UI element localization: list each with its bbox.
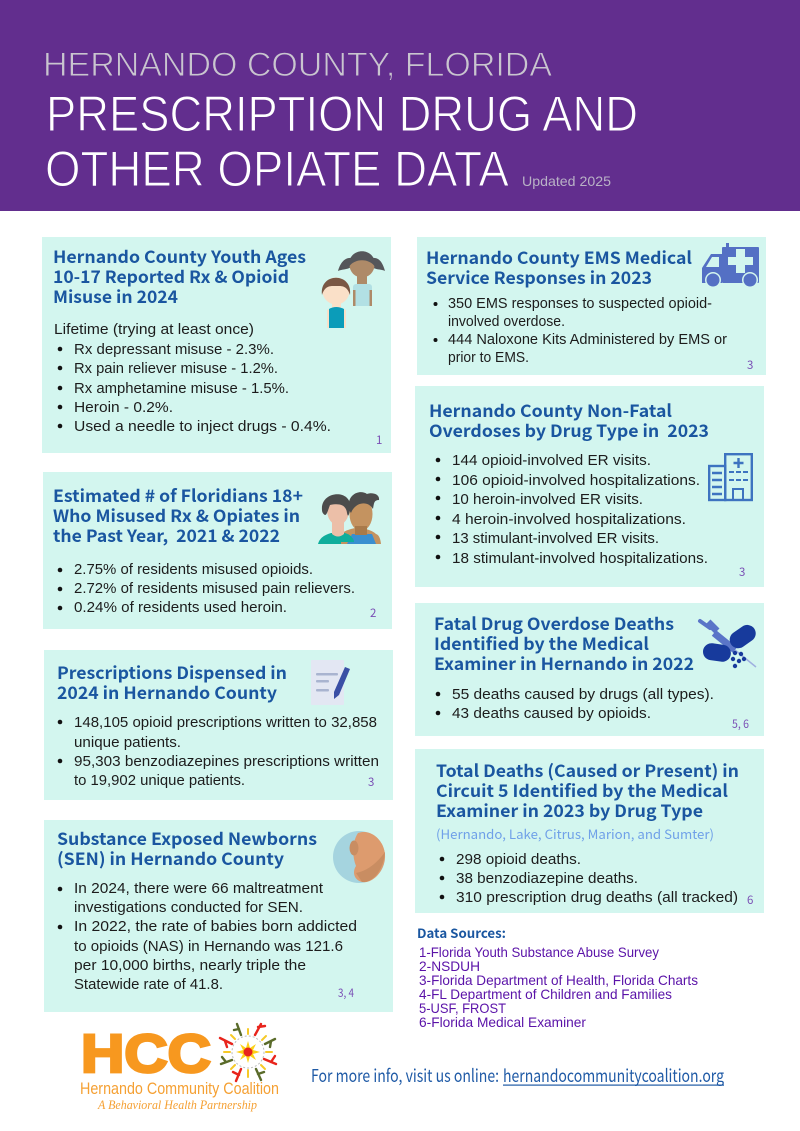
- bullet list: unique patients.: [74, 734, 181, 751]
- data sources list: 6-Florida Medical Examiner: [419, 1014, 586, 1030]
- source reference: 2: [370, 605, 376, 621]
- website call to action: hernandocommunitycoalition.org: [503, 1063, 724, 1088]
- source reference: 6: [747, 892, 753, 908]
- icon: newborn: [333, 831, 385, 883]
- heading: adult misuse: Estimated # of Floridians 18+: [53, 482, 303, 507]
- heading: newborns: (SEN) in Hernando County: [57, 845, 284, 870]
- bullet list: 298 opioid deaths.: [456, 851, 581, 868]
- bullet list: 148,105 opioid prescriptions written to 32,858: [74, 714, 377, 731]
- heading: EMS: Service Responses in 2023: [426, 264, 652, 289]
- main title: OTHER OPIATE DATA: [45, 141, 510, 197]
- icon: prescription pad and pen: [311, 660, 350, 705]
- bullet list: 95,303 benzodiazepines prescriptions written: [74, 753, 379, 770]
- bullet list: [436, 452, 708, 567]
- updated note: Updated 2025: [522, 173, 611, 189]
- heading: newborns: [57, 825, 317, 870]
- panel: non-fatal overdoses: [415, 386, 764, 587]
- data sources list: [419, 944, 698, 1030]
- bullet list: 444 Naloxone Kits Administered by EMS or: [448, 331, 727, 348]
- heading: prescriptions: [57, 659, 287, 704]
- source reference: 3: [739, 564, 745, 580]
- bullet list: per 10,000 births, nearly triple the: [74, 957, 306, 974]
- bullet list: involved overdose.: [448, 313, 565, 330]
- heading: EMS: Hernando County EMS Medical: [426, 244, 692, 269]
- heading: fatal overdoses: Examiner in Hernando in 2022: [434, 650, 694, 675]
- website call to action: For more info, visit us online:: [311, 1063, 499, 1088]
- panel: youth misuse: [42, 237, 391, 453]
- bullet list: 10 heroin-involved ER visits.: [452, 491, 643, 508]
- bullet list: 2.72% of residents misused pain relievers.: [74, 580, 355, 597]
- panel: fatal overdose deaths: [415, 603, 764, 736]
- panel: adult misuse: [43, 472, 392, 629]
- bullet list: investigations conducted for SEN.: [74, 899, 303, 916]
- source reference: 3: [747, 357, 753, 373]
- source reference: 3, 4: [338, 985, 355, 1001]
- bullet list: Used a needle to inject drugs - 0.4%.: [74, 418, 331, 435]
- heading: total deaths: Total Deaths (Caused or Present) in: [436, 757, 739, 782]
- bullet list: In 2024, there were 66 maltreatment: [74, 880, 324, 897]
- bullet list: 2.75% of residents misused opioids.: [74, 561, 313, 578]
- logo letters: HCC: [81, 1024, 211, 1084]
- main title: PRESCRIPTION DRUG AND: [46, 86, 638, 142]
- heading: youth misuse: Misuse in 2024: [53, 283, 178, 308]
- data sources list: 3-Florida Department of Health, Florida Charts: [419, 972, 698, 988]
- heading: fatal overdoses: Fatal Drug Overdose Deaths: [434, 610, 674, 635]
- bullet list: [436, 686, 714, 722]
- website call to action: [311, 1063, 724, 1088]
- bullet list: [440, 851, 738, 906]
- heading: EMS: [426, 244, 692, 289]
- logo emblem: ring of figures around sun: [220, 1024, 276, 1081]
- source reference: 1: [376, 432, 382, 448]
- heading: youth misuse: Hernando County Youth Ages: [53, 243, 306, 268]
- bullet list: 350 EMS responses to suspected opioid-: [448, 295, 712, 312]
- heading: non-fatal overdoses: [429, 397, 709, 442]
- bullet list: 43 deaths caused by opioids.: [452, 705, 651, 722]
- bullet list: prior to EMS.: [448, 349, 529, 366]
- bullet list: 310 prescription drug deaths (all tracked): [456, 889, 738, 906]
- bullet list: [58, 561, 355, 616]
- bullet list: [58, 341, 331, 435]
- bullet list: Rx pain reliever misuse - 1.2%.: [74, 360, 278, 377]
- bullet list: to 19,902 unique patients.: [74, 772, 245, 789]
- icon: syringe and pills: [700, 621, 759, 668]
- data sources: [417, 923, 698, 1030]
- heading: adult misuse: Who Misused Rx & Opiates in: [53, 502, 300, 527]
- bullet list: Rx depressant misuse - 2.3%.: [74, 341, 274, 358]
- heading: non-fatal overdoses: Overdoses by Drug Type in 2023: [429, 417, 709, 442]
- bullet list: to opioids (NAS) in Hernando was 121.6: [74, 938, 343, 955]
- bullet list: Rx amphetamine misuse - 1.5%.: [74, 380, 289, 397]
- bullet list: Statewide rate of 41.8.: [74, 976, 223, 993]
- icon: two adults: [318, 492, 381, 544]
- main title: [45, 86, 638, 197]
- data sources list: 2-NSDUH: [419, 958, 480, 974]
- bullet list: 0.24% of residents used heroin.: [74, 599, 287, 616]
- heading: newborns: Substance Exposed Newborns: [57, 825, 317, 850]
- heading: fatal overdoses: Identified by the Medical: [434, 630, 649, 655]
- panel: prescriptions dispensed: [44, 650, 393, 800]
- heading: adult misuse: [53, 482, 303, 547]
- icon: two children: [322, 251, 385, 328]
- logo: Hernando Community Coalition: [80, 1024, 279, 1112]
- bullet list: 18 stimulant-involved hospitalizations.: [452, 550, 708, 567]
- heading: non-fatal overdoses: Hernando County Non-Fatal: [429, 397, 672, 422]
- panel: substance exposed newborns: [44, 820, 393, 1012]
- heading: prescriptions: 2024 in Hernando County: [57, 679, 277, 704]
- bullet list: [434, 295, 727, 366]
- data sources list: 1-Florida Youth Substance Abuse Survey: [419, 944, 659, 960]
- heading: prescriptions: Prescriptions Dispensed in: [57, 659, 287, 684]
- bullet list: 4 heroin-involved hospitalizations.: [452, 511, 686, 528]
- logo name: Hernando Community Coalition: [80, 1079, 279, 1098]
- panel: total deaths circuit 5: [415, 749, 764, 913]
- heading: total deaths: Circuit 5 Identified by the Medical: [436, 777, 728, 802]
- intro line: Lifetime (trying at least once): [54, 321, 254, 338]
- icon: hospital: [709, 454, 752, 500]
- bullet list: Heroin - 0.2%.: [74, 399, 173, 416]
- data sources heading: Data Sources:: [417, 923, 506, 942]
- bullet list: 55 deaths caused by drugs (all types).: [452, 686, 714, 703]
- counties note: (Hernando, Lake, Citrus, Marion, and Sumter): [436, 824, 714, 843]
- bullet list: In 2022, the rate of babies born addicted: [74, 918, 357, 935]
- header banner: [0, 0, 800, 211]
- bullet list: 144 opioid-involved ER visits.: [452, 452, 651, 469]
- bullet list: [58, 880, 357, 993]
- heading: youth misuse: [53, 243, 306, 308]
- bullet list: [58, 714, 379, 789]
- icon: ambulance: [702, 243, 759, 288]
- bullet list: 38 benzodiazepine deaths.: [456, 870, 638, 887]
- heading: adult misuse: the Past Year, 2021 & 2022: [53, 522, 280, 547]
- bullet list: 106 opioid-involved hospitalizations.: [452, 472, 700, 489]
- source reference: 5, 6: [732, 716, 749, 732]
- logo tagline: A Behavioral Health Partnership: [97, 1098, 257, 1112]
- source reference: 3: [368, 774, 374, 790]
- data sources list: 5-USF, FROST: [419, 1000, 506, 1016]
- heading: youth misuse: 10-17 Reported Rx & Opioid: [53, 263, 289, 288]
- panel: EMS responses: [417, 237, 766, 375]
- heading: fatal overdoses: [434, 610, 694, 675]
- data sources list: 4-FL Department of Children and Families: [419, 986, 672, 1002]
- heading: total deaths: Examiner in 2023 by Drug Type: [436, 797, 703, 822]
- bullet list: 13 stimulant-involved ER visits.: [452, 530, 659, 547]
- county subtitle: HERNANDO COUNTY, FLORIDA: [43, 46, 552, 84]
- heading: total deaths: [436, 757, 739, 822]
